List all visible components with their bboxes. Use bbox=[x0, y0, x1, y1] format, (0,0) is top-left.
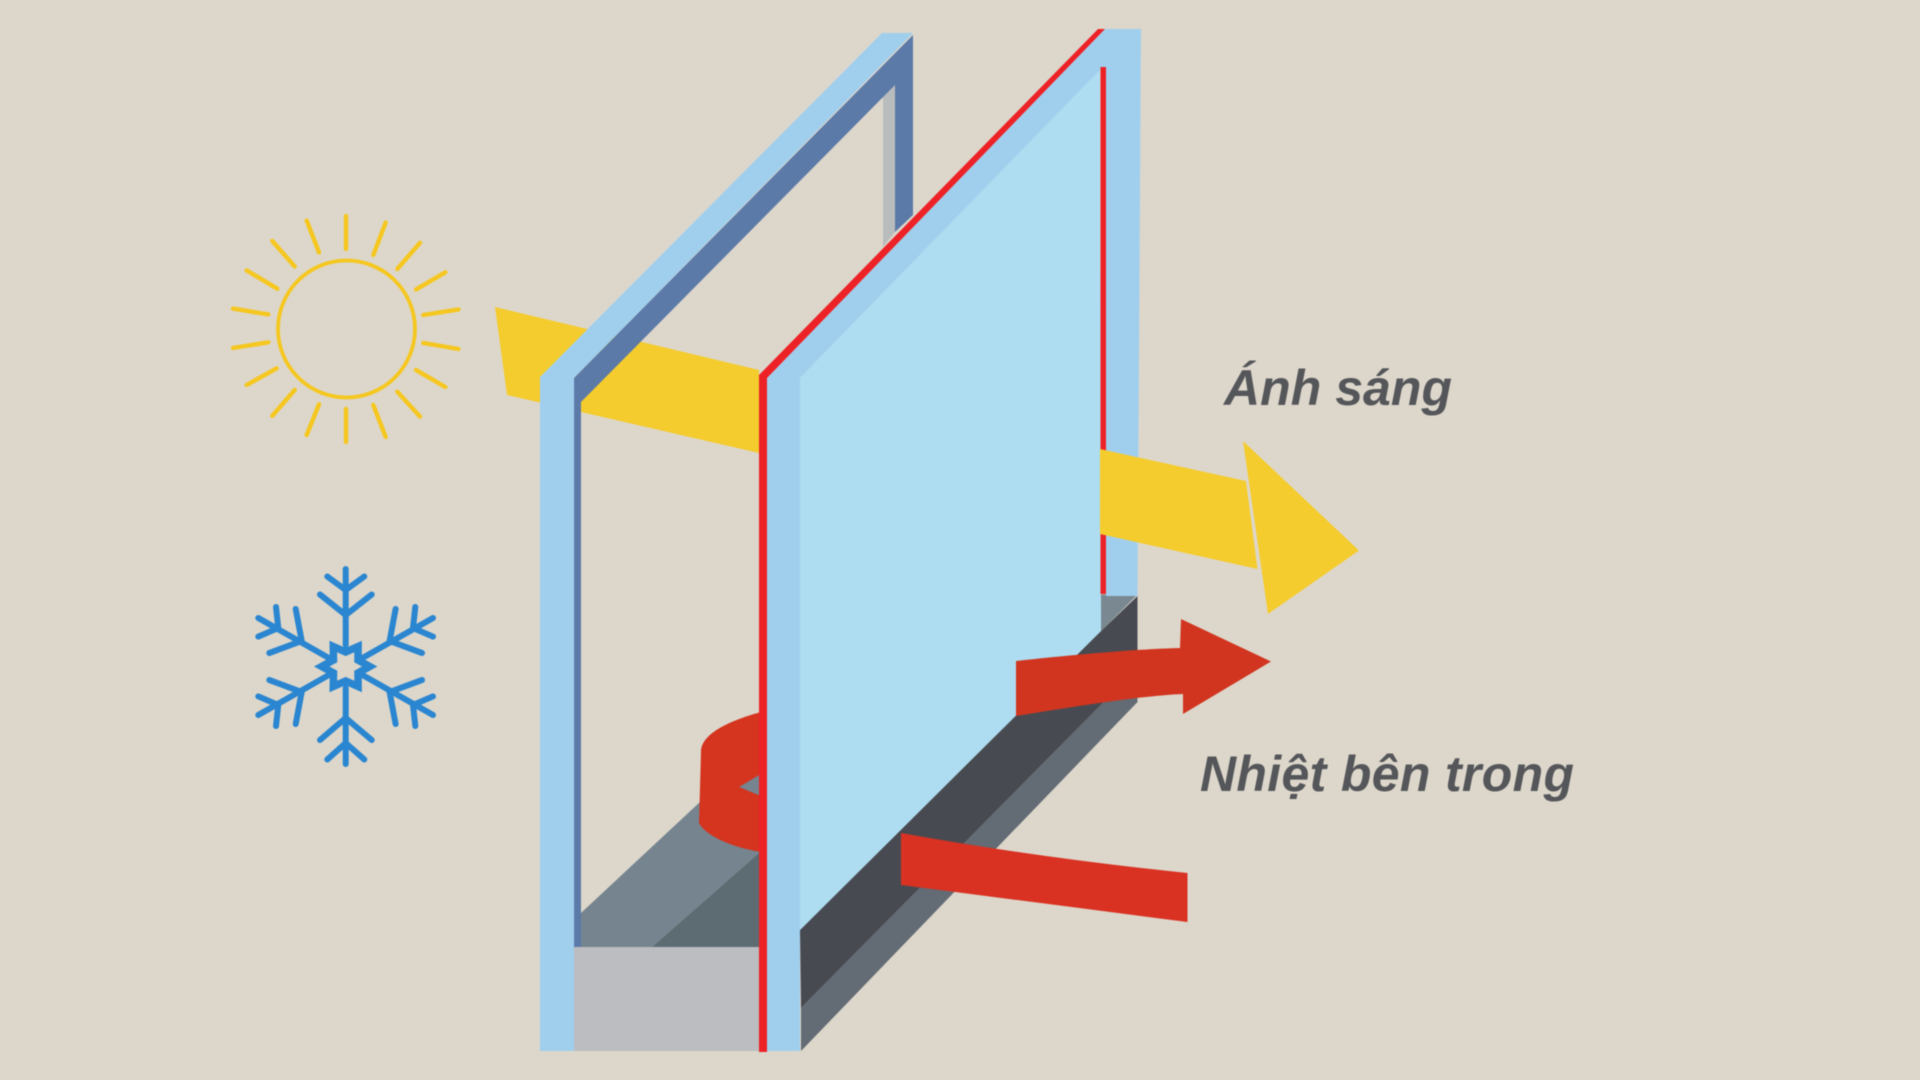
label: interior heat: Nhiệt bên trong bbox=[1200, 746, 1574, 802]
low-e coating right edge bbox=[1100, 67, 1106, 594]
rear frame shadow bbox=[574, 35, 913, 947]
window: front pane bbox=[759, 29, 1141, 1052]
arrow: heat entering bbox=[901, 833, 1188, 922]
spacer front face bbox=[574, 947, 759, 1051]
window: base of front pane bbox=[800, 594, 1138, 1051]
arrow: heat curling back bbox=[699, 712, 761, 852]
front frame bbox=[767, 29, 1141, 1051]
icon: snowflake bbox=[258, 569, 433, 764]
rear frame bbox=[540, 33, 913, 1051]
rear inner grey strip bbox=[883, 85, 895, 247]
arrow: incoming sunlight band bbox=[495, 307, 759, 453]
spacer floor bbox=[574, 747, 759, 947]
arrow: transmitted sunlight bbox=[1100, 441, 1359, 614]
window: rear pane bbox=[540, 33, 913, 1051]
label: light: Ánh sáng bbox=[1222, 360, 1452, 416]
low-e coating edge bbox=[759, 29, 1105, 1052]
arrow: heat reflected outward bbox=[1016, 619, 1271, 716]
glass bbox=[800, 70, 1101, 930]
icon: sun bbox=[233, 216, 458, 442]
